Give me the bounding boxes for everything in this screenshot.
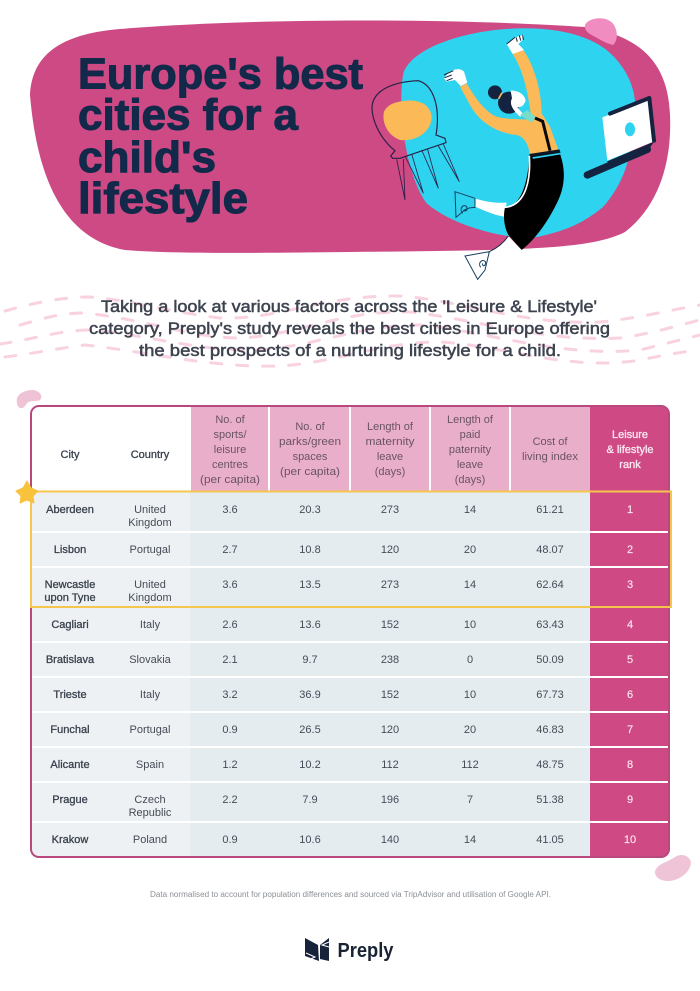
row: Funchal: 7 — [627, 724, 633, 736]
row: Alicante: Spain — [136, 759, 164, 771]
row: Funchal: Portugal — [130, 724, 170, 736]
row: Newcastle upon Tyne: Newcastle — [45, 579, 95, 591]
icon: star — [16, 481, 38, 503]
row: Cagliari: 2.6 — [222, 619, 238, 631]
header labels: & lifestyle — [606, 444, 654, 456]
row: Bratislava: Bratislava — [46, 654, 95, 666]
row: Funchal: 26.5 — [299, 724, 321, 736]
row: Lisbon: 2 — [627, 544, 633, 556]
icon: Preply book mark — [305, 938, 329, 961]
row: Cagliari: 63.43 — [536, 619, 564, 631]
row: Lisbon: 20 — [464, 544, 476, 556]
row: Lisbon: 48.07 — [536, 544, 564, 556]
header labels: (days) — [375, 466, 405, 478]
row: Trieste: Italy — [140, 689, 161, 701]
row separators — [32, 531, 668, 823]
row: Krakow: Krakow — [52, 834, 88, 846]
pink blob — [585, 18, 617, 45]
row: Alicante: 48.75 — [536, 759, 564, 771]
row: Krakow: 41.05 — [536, 834, 564, 846]
header labels: Country — [131, 449, 170, 461]
header labels: parks/green — [279, 436, 341, 448]
row: Newcastle upon Tyne: United — [134, 579, 166, 591]
title: cities for a — [78, 90, 299, 140]
row: Lisbon: 10.8 — [299, 544, 321, 556]
illustration: woman leaping with chair and laptop — [372, 18, 655, 279]
row: Aberdeen: Kingdom — [128, 517, 172, 529]
row: Bratislava: 50.09 — [536, 654, 564, 666]
chair — [372, 81, 459, 200]
decorative blob bottom-right of table — [655, 855, 691, 881]
row: Trieste: Trieste — [53, 689, 87, 701]
row: Prague: Czech — [134, 794, 166, 806]
row: Alicante: 8 — [627, 759, 633, 771]
header labels: City — [61, 449, 80, 461]
row: Trieste: 6 — [627, 689, 633, 701]
cyan circle backdrop — [401, 28, 635, 238]
decorative blob top-left of table — [17, 390, 41, 408]
row: Funchal: 20 — [464, 724, 476, 736]
row: Bratislava: Slovakia — [129, 654, 172, 666]
intro text: category, Preply's study reveals the best cities in Europe offering — [89, 320, 610, 338]
row: Prague: 7 — [467, 794, 473, 806]
hair and face — [488, 85, 502, 99]
row: Alicante — [50, 759, 633, 771]
wordmark: Preply — [338, 939, 394, 962]
row: Bratislava: 5 — [627, 654, 633, 666]
row: Lisbon: 2.7 — [222, 544, 238, 556]
row: Prague: 7.9 — [302, 794, 318, 806]
header labels: Length of — [447, 414, 494, 426]
header labels: maternity — [366, 436, 415, 448]
row: Aberdeen: 61.21 — [536, 504, 564, 516]
row: Trieste: 36.9 — [299, 689, 321, 701]
row: Newcastle upon Tyne — [44, 579, 633, 604]
title: child's — [78, 133, 216, 182]
data table — [31, 406, 669, 857]
row: Alicante: 112 — [381, 759, 399, 771]
row: Funchal: 120 — [381, 724, 399, 736]
header labels: centres — [212, 459, 249, 471]
row: Prague: 51.38 — [536, 794, 564, 806]
row: Lisbon: Portugal — [130, 544, 170, 556]
row: Prague — [52, 794, 633, 819]
row: Aberdeen: 273 — [381, 504, 399, 516]
row: Aberdeen: Aberdeen — [46, 504, 94, 516]
row: Newcastle upon Tyne: 13.5 — [299, 579, 321, 591]
footnote: Data normalised to account for population differences and sourced via TripAdvisor and utilisation of Google API. — [150, 890, 551, 899]
strap — [535, 118, 550, 151]
header labels — [61, 414, 654, 486]
row: Lisbon — [54, 544, 633, 556]
header labels: leave — [457, 459, 483, 471]
row: Newcastle upon Tyne: 273 — [381, 579, 399, 591]
row: Newcastle upon Tyne: 3.6 — [222, 579, 238, 591]
hands — [444, 69, 467, 86]
row: Aberdeen: 20.3 — [299, 504, 321, 516]
row: Funchal: 46.83 — [536, 724, 564, 736]
row: Aberdeen — [46, 504, 633, 529]
row: Alicante: 1.2 — [222, 759, 238, 771]
woman upper body — [444, 35, 559, 159]
row: Cagliari — [51, 619, 633, 631]
header labels: living index — [522, 451, 579, 463]
row: Krakow: 10.6 — [299, 834, 321, 846]
row: Newcastle upon Tyne: 3 — [627, 579, 633, 591]
row: Cagliari: 152 — [381, 619, 399, 631]
row: Bratislava: 9.7 — [302, 654, 318, 666]
row: Bratislava: 238 — [381, 654, 399, 666]
header labels: paid — [460, 429, 480, 441]
row: Trieste: 3.2 — [222, 689, 238, 701]
Preply logo — [305, 938, 394, 962]
header labels: Cost of — [533, 436, 568, 448]
title: Europe's best — [78, 50, 363, 98]
row: Newcastle upon Tyne: 14 — [464, 579, 476, 591]
header labels: paternity — [449, 444, 492, 456]
header labels: spaces — [293, 451, 328, 463]
header labels: (per capita) — [200, 474, 260, 486]
header banner blob — [30, 20, 670, 253]
header labels: leisure — [214, 444, 246, 456]
row: Newcastle upon Tyne: 62.64 — [536, 579, 564, 591]
row: Aberdeen: 1 — [627, 504, 633, 516]
row: Newcastle upon Tyne: Kingdom — [128, 592, 172, 604]
row: Prague: Prague — [52, 794, 88, 806]
row: Prague: Republic — [129, 807, 172, 819]
row: Lisbon: 120 — [381, 544, 399, 556]
header labels: rank — [619, 459, 641, 471]
row: Cagliari: 10 — [464, 619, 476, 631]
row: Cagliari: Italy — [140, 619, 161, 631]
row: Aberdeen: United — [134, 504, 166, 516]
row: Cagliari: Cagliari — [51, 619, 89, 631]
row: Alicante: 112 — [461, 759, 479, 771]
table header cells — [191, 406, 669, 857]
intro text — [89, 298, 610, 360]
intro text: Taking a look at various factors across the 'Leisure & Lifestyle' — [101, 298, 597, 316]
row: Funchal — [50, 724, 633, 736]
table border — [31, 406, 669, 857]
header labels: sports/ — [213, 429, 247, 441]
header labels: leave — [377, 451, 403, 463]
row: Alicante: Alicante — [50, 759, 90, 771]
laptop — [587, 98, 655, 175]
row: Funchal: 0.9 — [222, 724, 238, 736]
row: Krakow: Poland — [133, 834, 167, 846]
row: Trieste — [53, 689, 633, 701]
row: Alicante: 10.2 — [299, 759, 321, 771]
row: Cagliari: 4 — [627, 619, 633, 631]
header labels: Leisure — [612, 429, 648, 441]
top three highlight box — [31, 492, 671, 607]
row: Bratislava — [46, 654, 633, 666]
row: Funchal: Funchal — [50, 724, 90, 736]
row: Newcastle upon Tyne: upon Tyne — [44, 592, 96, 604]
row: Aberdeen: 3.6 — [222, 504, 238, 516]
row: Prague: 2.2 — [222, 794, 238, 806]
body background — [32, 491, 190, 856]
title: lifestyle — [78, 174, 248, 223]
row: Bratislava: 0 — [467, 654, 473, 666]
row: Prague: 9 — [627, 794, 633, 806]
sweater and arms — [460, 50, 559, 159]
row: Krakow — [52, 834, 636, 846]
row: Prague: 196 — [381, 794, 399, 806]
row: Trieste: 67.73 — [536, 689, 564, 701]
row: Bratislava: 2.1 — [222, 654, 238, 666]
wavy dashed background pattern — [0, 296, 700, 366]
row: Krakow: 14 — [464, 834, 476, 846]
row: Aberdeen: 14 — [464, 504, 476, 516]
title — [78, 50, 363, 223]
header labels: No. of — [295, 421, 326, 433]
row: Krakow: 10 — [624, 834, 636, 846]
header labels: (per capita) — [280, 466, 340, 478]
intro text: the best prospects of a nurturing lifestyle for a child. — [139, 342, 561, 360]
row: Trieste: 10 — [464, 689, 476, 701]
header labels: No. of — [215, 414, 246, 426]
header labels: Length of — [367, 421, 414, 433]
header labels: (days) — [455, 474, 485, 486]
row: Krakow: 0.9 — [222, 834, 238, 846]
row: Krakow: 140 — [381, 834, 399, 846]
woman skirt and legs — [455, 149, 564, 279]
row: Cagliari: 13.6 — [299, 619, 321, 631]
row: Trieste: 152 — [381, 689, 399, 701]
row: Lisbon: Lisbon — [54, 544, 86, 556]
